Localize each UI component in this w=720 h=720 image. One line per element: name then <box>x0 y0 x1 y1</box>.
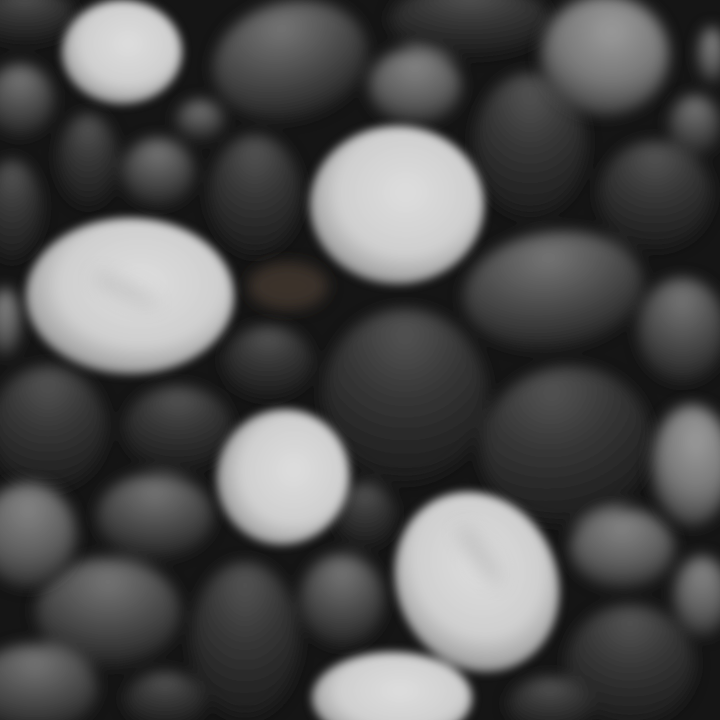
white pebbles <box>26 0 588 720</box>
small brown pebble <box>248 262 328 310</box>
crease marks on white pebbles <box>89 268 508 590</box>
